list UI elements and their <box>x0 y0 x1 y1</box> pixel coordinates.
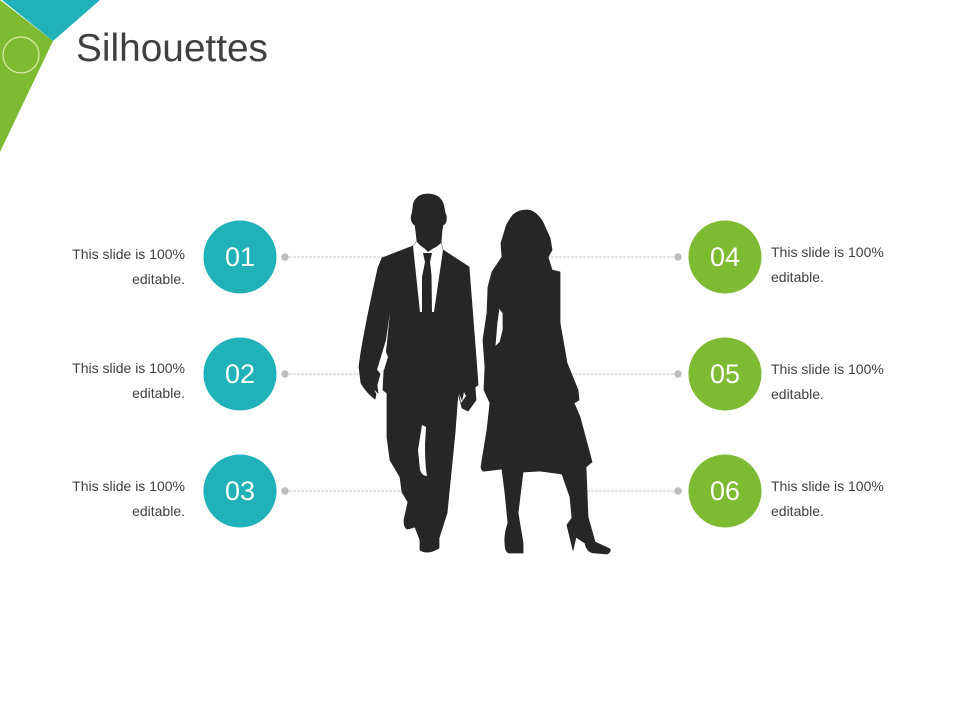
text 05: This slide is 100% <box>771 361 884 377</box>
text 04: This slide is 100% <box>771 244 884 260</box>
text 04 <box>771 244 884 285</box>
text 05 <box>771 361 884 402</box>
silhouette: woman <box>481 210 610 554</box>
badge 01 <box>204 220 276 294</box>
shirt <box>413 241 443 312</box>
badge 05 <box>688 338 762 410</box>
connector 05 <box>570 370 682 378</box>
text 05: editable. <box>771 386 824 402</box>
connector 06 <box>585 487 682 495</box>
text 02: This slide is 100% <box>72 360 185 376</box>
badge 04 <box>688 220 762 294</box>
corner decoration <box>0 0 100 152</box>
badge 06 <box>688 454 762 528</box>
hand gap <box>459 392 466 403</box>
neck <box>416 230 442 249</box>
text 02 <box>72 360 185 401</box>
title: Silhouettes <box>76 27 268 70</box>
connector 02 <box>281 370 365 378</box>
text 01 <box>72 246 185 287</box>
silhouette: man <box>359 194 478 552</box>
badge 03 <box>204 454 276 528</box>
connector 01 <box>281 253 385 261</box>
text 06: This slide is 100% <box>771 478 884 494</box>
text 04: editable. <box>771 269 824 285</box>
badge 03: 03 <box>225 476 255 506</box>
leg gap <box>418 425 427 476</box>
text 06: editable. <box>771 503 824 519</box>
text 01: This slide is 100% <box>72 246 185 262</box>
tie <box>422 253 432 313</box>
badge 05: 05 <box>710 359 740 389</box>
badge 04: 04 <box>710 242 740 272</box>
arm gap <box>377 312 390 370</box>
badge 06: 06 <box>710 476 740 506</box>
text 06 <box>771 478 884 519</box>
connector 04 <box>548 253 682 261</box>
badge 02: 02 <box>225 359 255 389</box>
badge 02 <box>204 338 276 410</box>
text 02: editable. <box>132 385 185 401</box>
text 01: editable. <box>132 271 185 287</box>
text 03: This slide is 100% <box>72 478 185 494</box>
connector 03 <box>281 487 405 495</box>
text 03 <box>72 478 185 519</box>
text 03: editable. <box>132 503 185 519</box>
badge 01: 01 <box>225 242 255 272</box>
